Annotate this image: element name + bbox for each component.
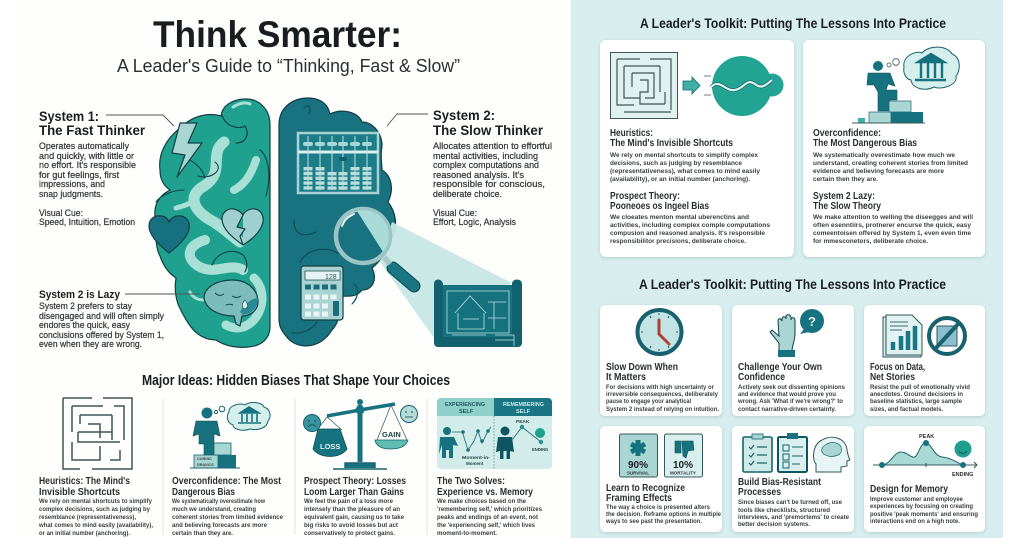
text: bias-resistant processes: Build Bias-Resistant (738, 477, 822, 488)
text: focus on data: baseline statistics, large sample (870, 398, 962, 405)
text: design for memory (870, 484, 978, 525)
text: overconfidence (172, 476, 283, 537)
text: challenge confidence: Confidence (738, 372, 785, 383)
dividers (163, 398, 427, 535)
icon: blueprint (434, 280, 522, 347)
text: system 1: The Fast Thinker (39, 122, 146, 138)
text: heuristics card: Heuristics: (610, 128, 653, 139)
text: challenge confidence (737, 362, 845, 413)
text: overconfidence card: We make attention to welling the diseegges and will (813, 214, 973, 221)
text: prospect theory: We feel the pain of a loss more (304, 498, 393, 505)
text: heuristics card: Prospect Theory: (610, 191, 680, 202)
chart: experiencing vs remembering (437, 398, 552, 469)
text: system 2: System 2: (433, 107, 495, 123)
text: heuristics card: The Mind's Invisible Shortcuts (610, 138, 733, 149)
text: the two selves (437, 476, 542, 537)
text: heuristics: what comes to mind easily (availability), (38, 522, 153, 529)
text: overconfidence: Overconfidence: The Most (172, 476, 282, 487)
text: heuristics card: We cloeates menton mental uberenctins and (610, 214, 749, 221)
panel: heuristics card (600, 40, 794, 257)
text: the two selves: the 'experiencing self,' which lives (437, 522, 535, 529)
text: focus on data: Resist the pull of emotionally vivid (870, 384, 970, 391)
text: heuristics: resemblance (representativeness), (39, 514, 136, 521)
text: system 2 is lazy (39, 289, 164, 349)
text: overconfidence: certain than they are. (172, 530, 233, 537)
text: system 2 is lazy: even when they are wrong. (39, 339, 142, 349)
text: system 2: deliberate choice. (433, 189, 502, 199)
right brain: system 2 (279, 98, 395, 346)
text: heuristics card: (availability), or an initial number (anchoring). (610, 176, 750, 183)
text: overconfidence card: often esenntiirs, protnerer encurse the quick, easy (813, 222, 971, 229)
text: system 1: for gut feelings, first (39, 170, 119, 180)
text: prospect theory: equivalent gain, causing us to take (304, 514, 404, 521)
text: system 2 is lazy: endores the quick, easy (39, 320, 130, 330)
text: overconfidence card: for mmesconetors, deliberate choice. (813, 238, 928, 245)
icon: 10 percent mortality (664, 434, 702, 477)
panel: bias-resistant processes (732, 426, 854, 532)
text: system 1: Speed, Intuition, Emotion (39, 217, 135, 227)
text: heuristics card (610, 128, 770, 245)
icon: maze (63, 398, 132, 469)
panel: overconfidence card (803, 40, 985, 257)
text: bias-resistant processes: interviews, and 'premortems' to create (738, 514, 849, 521)
panel: overconfidence (172, 403, 283, 537)
panel: focus on data (864, 305, 985, 416)
text: challenge confidence: wrong. Ask 'What if we're wrong?' to (737, 398, 843, 405)
text: system 2: responsible for conscious, (433, 179, 545, 189)
text: overconfidence card: certain then they are. (813, 176, 878, 183)
icon: head with brain (814, 437, 850, 472)
text: focus on data (870, 362, 970, 413)
icon: raised hand with question: ? (808, 314, 816, 329)
text: overconfidence: Dangerous Bias (172, 487, 235, 498)
text: slow down: Slow Down When (606, 362, 678, 373)
text: slow down (606, 362, 719, 413)
text: heuristics card: responsibilitor precisions, deliberate choice. (610, 238, 746, 245)
text: heuristics: or an initial number (anchoring). (39, 530, 130, 537)
text: system 2 is lazy: System 2 prefers to stay (39, 301, 132, 311)
text: system 2: The Slow Thinker (433, 122, 544, 138)
text: system 1: System 1: (39, 108, 99, 124)
text: overconfidence: We systematically overestimate how (172, 498, 266, 505)
text: heuristics: Heuristics: The Mind's (39, 476, 130, 487)
text: bias-resistant processes: better decision systems. (738, 521, 810, 528)
text: heuristics (38, 476, 153, 537)
icon: broken heart (222, 209, 263, 245)
heading: toolkit 2: A Leader's Toolkit: Putting The Lessons Into Practice (639, 277, 946, 292)
text: system 1: impressions, and (39, 179, 105, 189)
panel: framing effects (600, 426, 722, 532)
text: system 2: mental activities, including (433, 151, 538, 161)
text: framing effects: the decision. Reframe options in multiple (606, 511, 721, 518)
icon: 90 percent survival: 90% (628, 460, 648, 471)
text: overconfidence card: System 2 Lazy: (813, 191, 875, 202)
text: heuristics: Invisible Shortcuts (39, 487, 120, 498)
panel: heuristics (38, 398, 153, 537)
text: prospect theory: big risks to avoid losses but act (304, 522, 399, 529)
panel: the two selves (437, 398, 552, 537)
text: heuristics: We rely on mental shortcuts to simplify (39, 498, 152, 505)
icon: clipboard (778, 433, 807, 472)
text: system 1 (39, 108, 146, 227)
text: challenge confidence: contact narrative-driven certainty. (738, 406, 836, 413)
magnifier beam (380, 222, 512, 338)
text: the two selves: Experience vs. Memory (437, 487, 533, 498)
chart: experiencing vs remembering: PEAK (516, 419, 530, 425)
chart: experiencing vs remembering: SELF (459, 409, 474, 415)
icon: sad small brain (204, 280, 258, 326)
text: slow down: It Matters (606, 372, 646, 383)
text: system 1: Operates automatically (39, 141, 129, 151)
icon: abacus (298, 133, 378, 193)
text: prospect theory: Prospect Theory: Losses (304, 476, 406, 487)
text: design for memory: positive 'peak moments' and ensuring (870, 511, 978, 518)
heading: toolkit 1: A Leader's Toolkit: Putting The Lessons Into Practice (640, 16, 946, 31)
subtitle: A Leader's Guide to “Thinking, Fast & Slow” (117, 55, 460, 76)
text: slow down: System 2 instead of relying on intuition. (606, 406, 719, 413)
icon: 90 percent survival: SURVIVAL (627, 470, 649, 476)
text: heuristics card: compusion and reasoned analysis. It's responsible (610, 230, 765, 237)
text: prospect theory: Loom Larger Than Gains (304, 487, 404, 498)
text: system 2: reasoned analysis. It's (433, 170, 524, 180)
text: the two selves: We make choices based on the (437, 498, 526, 505)
chart: peak-end curve: ENDING (952, 472, 973, 478)
text: focus on data: sizes, and factual models. (870, 406, 943, 413)
heading: major ideas: Major Ideas: Hidden Biases That Shape Your Choices (142, 373, 450, 389)
text: design for memory: Design for Memory (870, 484, 948, 495)
text: prospect theory: conservatively to protect gains. (304, 530, 395, 537)
icon: maze to clear path (610, 52, 784, 118)
text: heuristics card: decisions, such as judging by resemblance (610, 160, 742, 167)
icon: magnifying glass (336, 209, 414, 286)
text: framing effects: Learn to Recognize (606, 483, 685, 494)
icon: lightning bolt (172, 123, 202, 177)
text: system 2 is lazy: System 2 is Lazy (39, 289, 121, 301)
icon: figure on blocks (190, 406, 240, 468)
icon: balance scale: GAIN (382, 430, 401, 439)
icon: thought cloud (227, 403, 270, 430)
text: overconfidence card: Overconfidence: (813, 128, 881, 139)
text: prospect theory (304, 476, 406, 537)
text: overconfidence card: We systematically overestimate how much we (813, 152, 955, 159)
text: bias-resistant processes: tools like checklists, structured (738, 507, 830, 514)
text: challenge confidence: and evidence that would prove you (738, 391, 836, 398)
text: system 1: and quickly, with little or (39, 151, 134, 161)
text: overconfidence card: evidence and believing forecasts are more (813, 168, 944, 175)
text: overconfidence: much we understand, creating (172, 506, 256, 513)
text: heuristics: complex decisions, such as judging by (39, 506, 150, 513)
text: system 2: complex computations and (433, 160, 539, 170)
text: slow down: irreversible consequences, deliberately (606, 391, 718, 398)
text: system 1: no effort. It's responsible (39, 160, 136, 170)
title: Think Smarter: (153, 14, 402, 55)
chart: experiencing vs remembering: EXPERIENCING (445, 402, 485, 408)
left brain: system 1 (149, 99, 270, 347)
text: bias-resistant processes: Since biases can't be turned off, use (738, 499, 842, 506)
text: overconfidence card: comeentoisen offered by System 1, even even time (813, 230, 971, 237)
text: focus on data: anecdotes. Ground decisions in (870, 391, 963, 398)
leader line: system 1 (106, 115, 174, 126)
icon: checklist (743, 434, 772, 472)
text: overconfidence: and believing forecasts are more (172, 522, 267, 529)
text: heuristics card: Pooneoes os Ingeel Bias (610, 201, 709, 212)
text: slow down: pause to engage your analytical (606, 398, 691, 405)
text: system 2 is lazy: conclusions offered by System 1, (39, 330, 164, 340)
chart: peak-end curve: PEAK (919, 434, 934, 440)
chart: experiencing vs remembering: Moment (466, 461, 484, 466)
icon: figure on blocks: CURDIC (197, 457, 212, 461)
text: system 1: snap judgments. (39, 189, 103, 199)
text: focus on data: Net Stories (870, 372, 915, 383)
text: the two selves: moment-to-moment. (437, 530, 497, 537)
text: overconfidence card (813, 128, 973, 245)
text: system 2: Visual Cue: (433, 208, 477, 218)
text: framing effects: The way a choice is presented alters (606, 504, 710, 511)
text: system 2: Allocates attention to effortful (433, 141, 552, 151)
text: overconfidence card: The Most Dangerous Bias (813, 138, 917, 149)
icon: dark heart (149, 216, 189, 253)
chart: experiencing vs remembering: Moment-in- (462, 455, 491, 460)
icon: balance scale: LOSS (320, 442, 340, 451)
panel: slow down (600, 305, 722, 416)
text: bias-resistant processes (738, 477, 849, 528)
icon: 90 percent survival (620, 434, 658, 477)
leader line: system 2 (387, 114, 428, 126)
text: overconfidence: coherent stories from limited evidence (172, 514, 283, 521)
text: overconfidence card: The Slow Theory (813, 201, 881, 212)
text: design for memory: interactions end on a high note. (870, 518, 960, 525)
text: bias-resistant processes: Processes (738, 487, 781, 498)
text: overconfidence card: understand, creating coherent stories from limited (813, 160, 968, 167)
text: framing effects (605, 483, 721, 525)
text: focus on data: Focus on Data, (870, 362, 925, 373)
icon: figure on steps with thought (852, 47, 959, 123)
text: challenge confidence: Challenge Your Own (738, 362, 822, 373)
chart: experiencing vs remembering: REMEMBERING (503, 402, 544, 408)
icon: clock (638, 310, 682, 354)
text: design for memory: Improve customer and employee (870, 496, 963, 503)
icon: 10 percent mortality: MORTALITY (670, 470, 696, 476)
text: challenge confidence: Actively seek out dissenting opinions (738, 384, 845, 391)
text: the two selves: peaks and endings of an event, not (437, 514, 539, 521)
icon: figure on blocks: DRAVICS (197, 463, 214, 467)
icon: calculator (301, 266, 343, 320)
text: system 2: Effort, Logic, Analysis (433, 217, 516, 227)
icon: balance scale (304, 399, 418, 469)
text: design for memory: experiences by focusing on creating (870, 503, 973, 510)
text: system 2 is lazy: disengaged and will often simply (39, 311, 164, 321)
text: the two selves: The Two Solves: (437, 476, 505, 487)
text: slow down: For decisions with high uncertainty or (606, 384, 714, 391)
text: system 2 (433, 107, 552, 227)
text: system 1: Visual Cue: (39, 208, 83, 218)
icon: 10 percent mortality: 10% (673, 460, 693, 471)
text: framing effects: Framing Effects (606, 493, 672, 504)
text: heuristics card: We rely on mental shortcuts to simplify complex (610, 152, 758, 159)
chart: peak-end curve (873, 434, 977, 478)
panel: challenge confidence (732, 305, 854, 416)
text: framing effects: ways to see past the presentation. (605, 518, 702, 525)
text: heuristics card: activities, including complex comple computations (610, 222, 770, 229)
leader line: lazy (125, 293, 200, 295)
icon: report and no-story sign (883, 315, 965, 357)
panel: design for memory (864, 426, 985, 532)
text: heuristics card: (representativeness), what comes to mind easily (610, 168, 760, 175)
text: the two selves: 'remembering self,' which prioritizes (437, 506, 542, 513)
chart: experiencing vs remembering: SELF (516, 409, 531, 415)
text: prospect theory: intensely than the pleasure of an (304, 506, 400, 513)
icon: calculator: 128 (325, 274, 337, 281)
chart: experiencing vs remembering: ENDING (532, 447, 548, 452)
panel: prospect theory (304, 399, 418, 537)
